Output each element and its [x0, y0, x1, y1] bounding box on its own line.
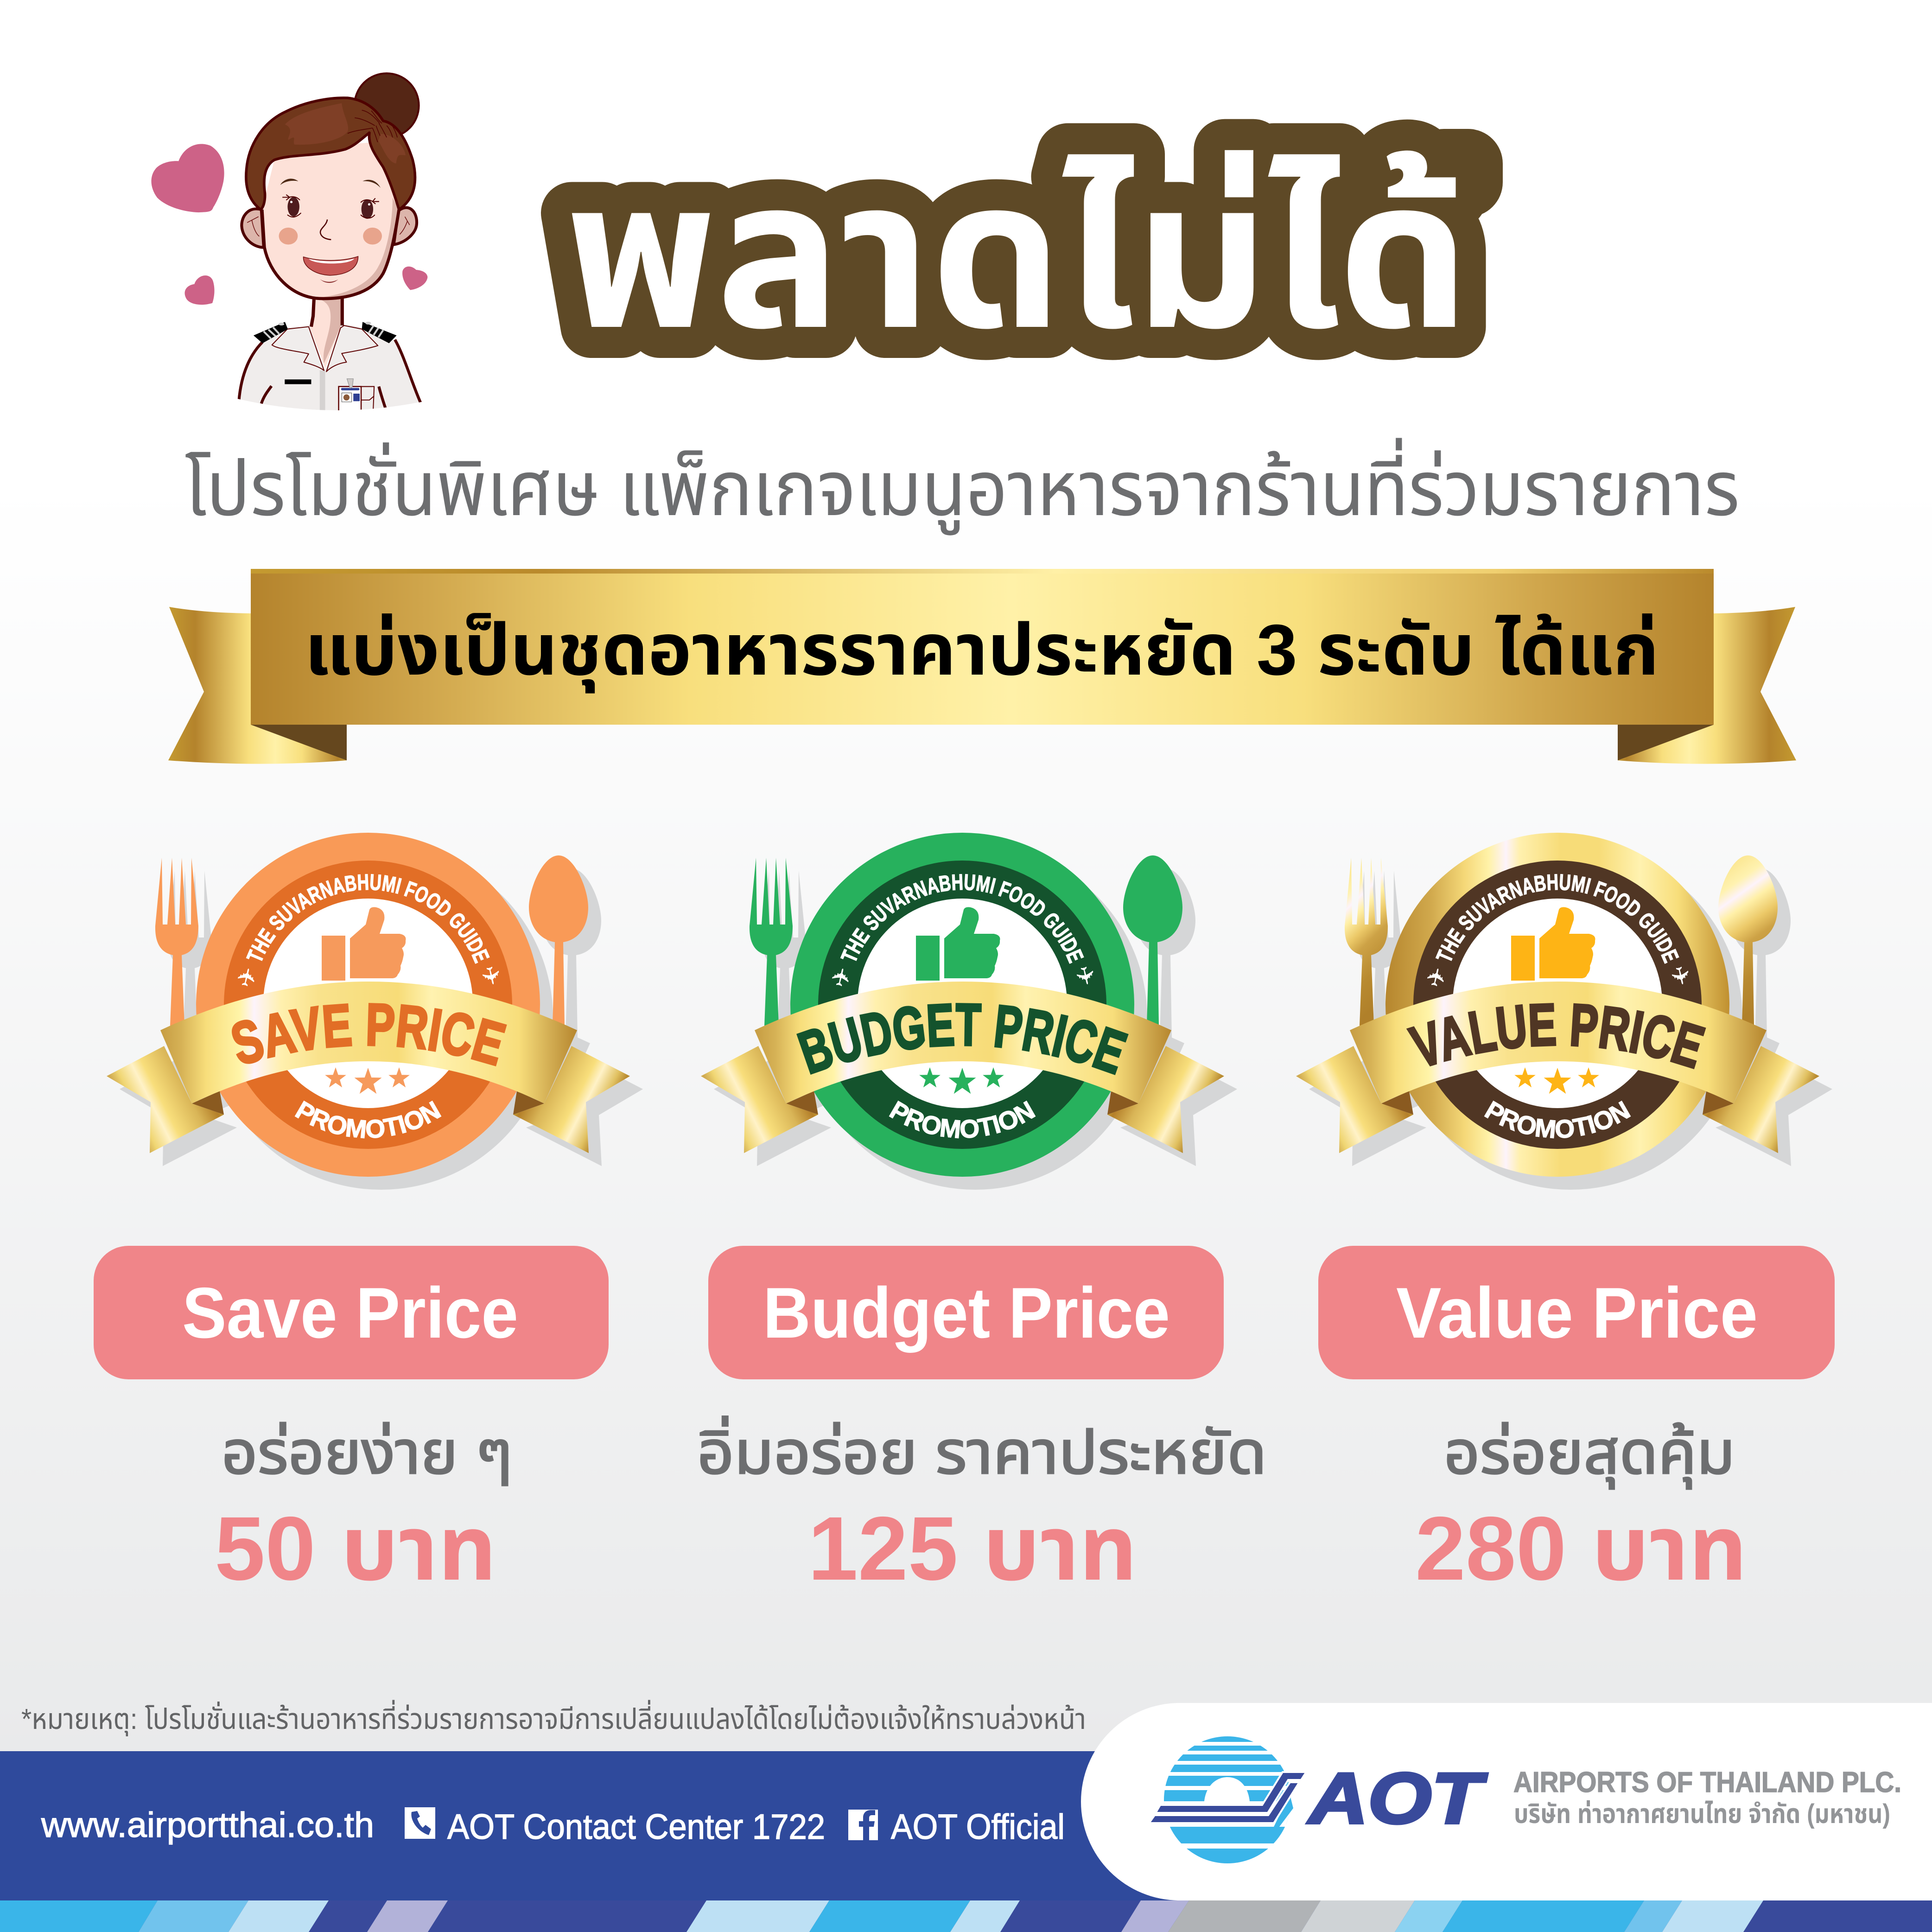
- badge: value price: VALUE PRICE: [1404, 992, 1711, 1081]
- pill label: [708, 1246, 1224, 1379]
- footer contact: website: www.airportthai.co.th: [41, 1805, 374, 1845]
- footer stripes: [0, 1900, 1932, 1932]
- price: 50 บาท: [215, 1498, 496, 1599]
- epaulettes: [254, 322, 397, 343]
- description: อร่อยสุดคุ้ม: [1444, 1419, 1735, 1489]
- badge: save price: ✈: [475, 963, 506, 989]
- pill label: Save Price: [182, 1273, 518, 1353]
- bun: [355, 73, 419, 138]
- icon: phone: [405, 1807, 435, 1839]
- badge: budget price: ✈: [1069, 963, 1100, 989]
- description: อิ่มอร่อย ราคาประหยัด: [697, 1416, 1267, 1486]
- badge: value price: THE SUVARNABHUMI FOOD GUIDE: [1432, 870, 1683, 966]
- footer white logo panel: [1081, 1703, 1932, 1900]
- gold ribbon banner: [168, 569, 1796, 764]
- price: 125 บาท: [808, 1498, 1137, 1599]
- hair: [246, 98, 415, 210]
- panel: budget price tier: [697, 1246, 1267, 1599]
- illustration: smiling AOT staff woman with hearts: [151, 73, 427, 413]
- badge: budget price: ✈: [826, 964, 858, 990]
- title: พลาดไม่ได้: [566, 139, 1469, 371]
- pill label: [94, 1246, 609, 1379]
- badge: value price: [1296, 833, 1832, 1190]
- badge: value price: ✈: [1421, 964, 1453, 990]
- neck: [310, 297, 343, 368]
- badge: value price: PROMOTION: [1480, 1095, 1635, 1144]
- ribbon tails: [168, 607, 347, 764]
- footer contact: facebook: AOT Official: [891, 1807, 1065, 1847]
- badge: save price: THE SUVARNABHUMI FOOD GUIDE: [242, 870, 494, 966]
- company name english: AIRPORTS OF THAILAND PLC.: [1513, 1766, 1901, 1798]
- badge: budget price: [701, 833, 1237, 1190]
- badge: save price: PROMOTION: [291, 1095, 445, 1144]
- badge: save price: ✈: [232, 964, 263, 990]
- ears: [242, 208, 417, 248]
- collar: [272, 325, 378, 372]
- footer band: [0, 1751, 1932, 1900]
- panel: save price tier: [94, 1246, 609, 1599]
- price: 280 บาท: [1415, 1498, 1747, 1599]
- icon: hearts: [151, 144, 427, 305]
- badge: budget price: BUDGET PRICE: [791, 992, 1134, 1086]
- title: พลาดไม่ได้: [566, 139, 1469, 371]
- AOT logo emblem: [1149, 1736, 1306, 1863]
- badge: value price: ✈: [1664, 963, 1696, 989]
- badge: budget price: THE SUVARNABHUMI FOOD GUIDE: [837, 870, 1088, 966]
- subtitle: โปรโมชั่นพิเศษ แพ็กเกจเมนูอาหารจากร้านที่ร่วมรายการ: [185, 438, 1740, 536]
- badge: save price: [107, 833, 643, 1190]
- description: อร่อยง่าย ๆ: [222, 1419, 513, 1486]
- pill label: [1318, 1246, 1835, 1379]
- badge: save price: SAVE PRICE: [224, 991, 512, 1078]
- banner text: แบ่งเป็นชุดอาหารราคาประหยัด 3 ระดับ ได้แก่: [305, 610, 1659, 693]
- pill label: Value Price: [1396, 1273, 1758, 1353]
- badge: budget price: PROMOTION: [885, 1095, 1040, 1144]
- icon: facebook: [848, 1810, 878, 1840]
- pill label: Budget Price: [763, 1273, 1170, 1353]
- footnote: *หมายเหตุ: โปรโมชั่นและร้านอาหารที่ร่วมรายการอาจมีการเปลี่ยนแปลงได้โดยไม่ต้องแจ้งให้ทราบล่วงหน้า: [21, 1700, 1086, 1736]
- face: [262, 141, 399, 299]
- AOT wordmark: AOT: [1307, 1758, 1487, 1838]
- panel: value price tier: [1318, 1246, 1835, 1599]
- footer contact: contact center: AOT Contact Center 1722: [447, 1807, 825, 1847]
- shirt and uniform: [238, 325, 421, 413]
- facial features: [279, 179, 382, 283]
